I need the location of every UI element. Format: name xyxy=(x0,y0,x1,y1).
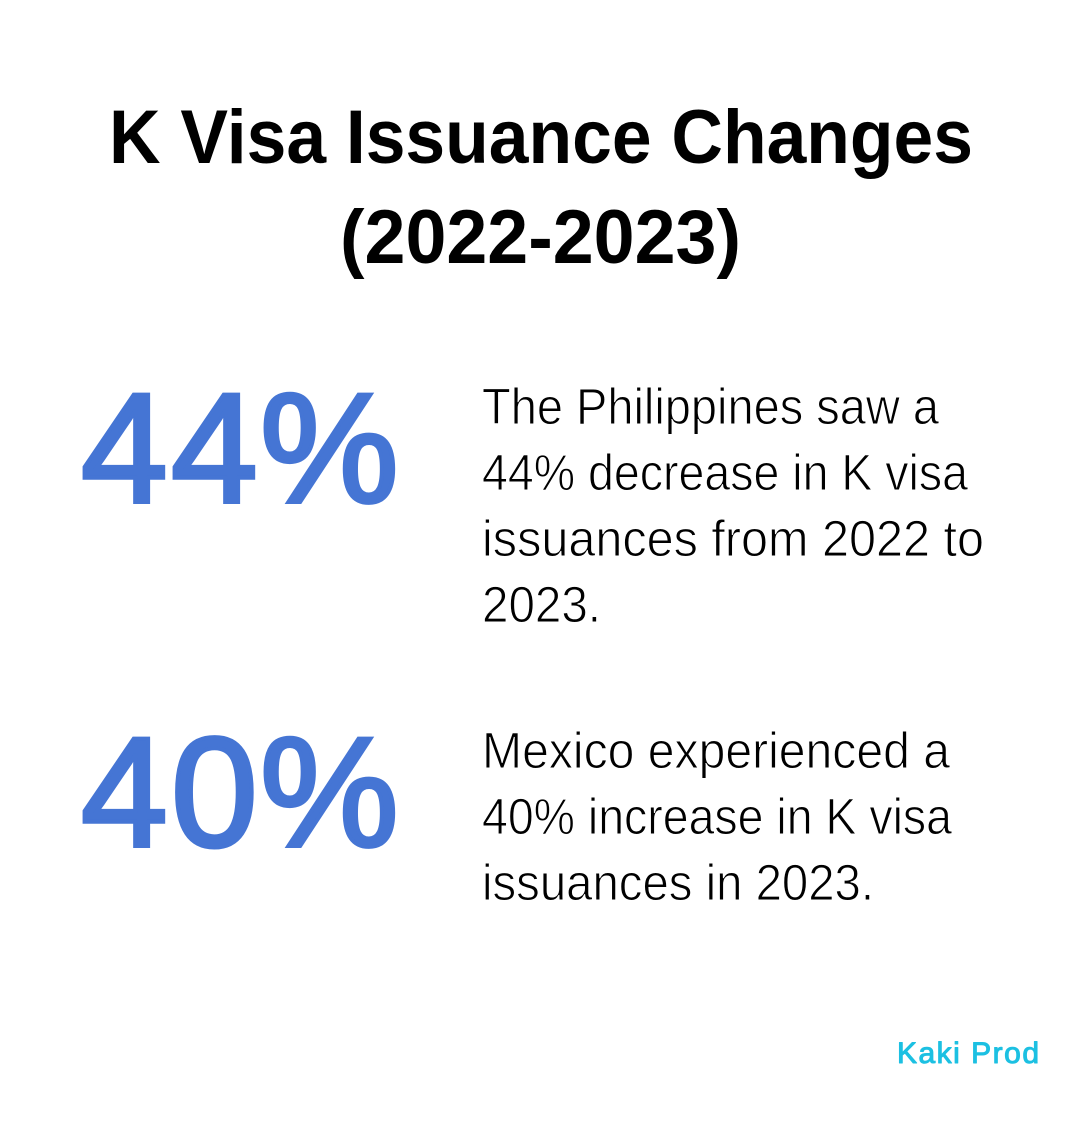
description: Philippines: 2023. xyxy=(482,576,601,633)
panel: Mexico statistic xyxy=(81,706,953,911)
description: Mexico: Mexico experienced a xyxy=(482,722,951,779)
description: Mexico: issuances in 2023. xyxy=(482,854,874,911)
description: Philippines: 44% decrease in K visa xyxy=(482,444,969,501)
description: Philippines: The Philippines saw a xyxy=(482,378,940,435)
title: K Visa Issuance Changes xyxy=(109,95,973,180)
title xyxy=(109,95,973,280)
panel: Philippines statistic xyxy=(81,362,984,633)
big number: 40%: 40% xyxy=(81,706,399,880)
description: Mexico xyxy=(482,722,953,911)
description: Philippines xyxy=(482,378,984,633)
big number: 44%: 44% xyxy=(81,362,399,536)
title: (2022-2023) xyxy=(340,195,741,280)
logo: Kaki Prod: Kaki Prod xyxy=(897,1037,1039,1070)
description: Mexico: 40% increase in K visa xyxy=(482,788,953,845)
description: Philippines: issuances from 2022 to xyxy=(482,510,984,567)
